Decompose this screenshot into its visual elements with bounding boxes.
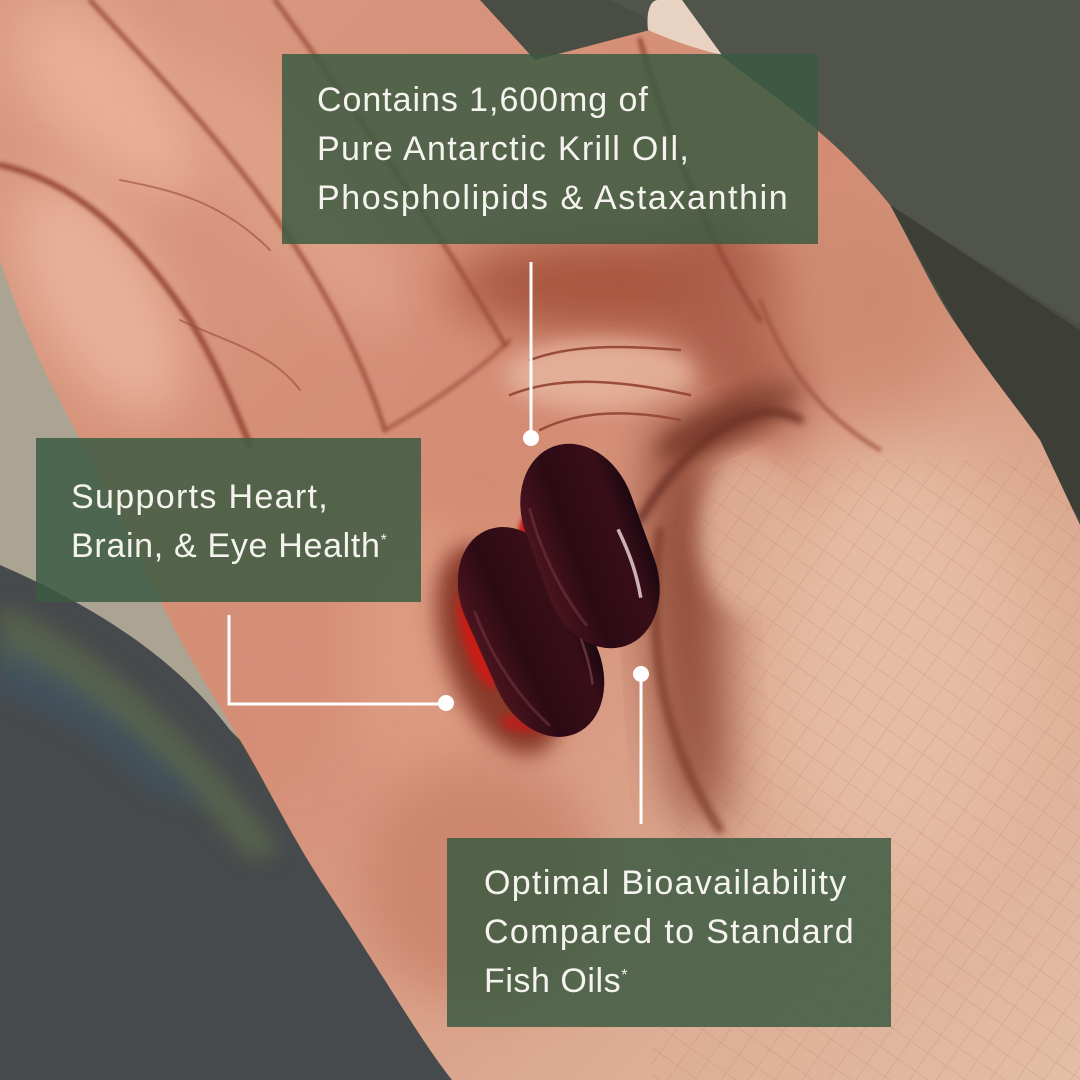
callout: krill oil content: Pure Antarctic Krill OIl,: [317, 130, 690, 168]
callout: bioavailability: Compared to Standard: [484, 913, 855, 951]
callout: heart brain eye health: Brain, & Eye Health*: [71, 527, 387, 565]
thumb-base skin texture: [650, 460, 1080, 1080]
softgel: lower left: [437, 509, 625, 755]
callout: bioavailability: [447, 838, 891, 1027]
finger creases: [0, 0, 880, 830]
callout: krill oil content: Phospholipids & Astaxanthin: [317, 179, 789, 217]
callout: heart brain eye health: Supports Heart,: [71, 478, 329, 516]
fingers highlights: [14, 4, 199, 202]
callout: heart brain eye health: [36, 438, 421, 602]
callout: bioavailability: Fish Oils*: [484, 962, 627, 1000]
connector: bottom callout to softgel: [633, 666, 649, 824]
connector: left callout to softgel: [229, 615, 454, 711]
callout: krill oil content: Contains 1,600mg of: [317, 81, 649, 119]
callout: krill oil content: [282, 54, 818, 244]
connector: top callout to softgel: [523, 262, 539, 446]
callout: bioavailability: Optimal Bioavailability: [484, 864, 848, 902]
thumbnail: [647, 0, 722, 55]
shadow and red glow under softgels: [411, 513, 589, 772]
softgel: upper right: [501, 427, 679, 665]
palm shadows: [434, 244, 702, 348]
